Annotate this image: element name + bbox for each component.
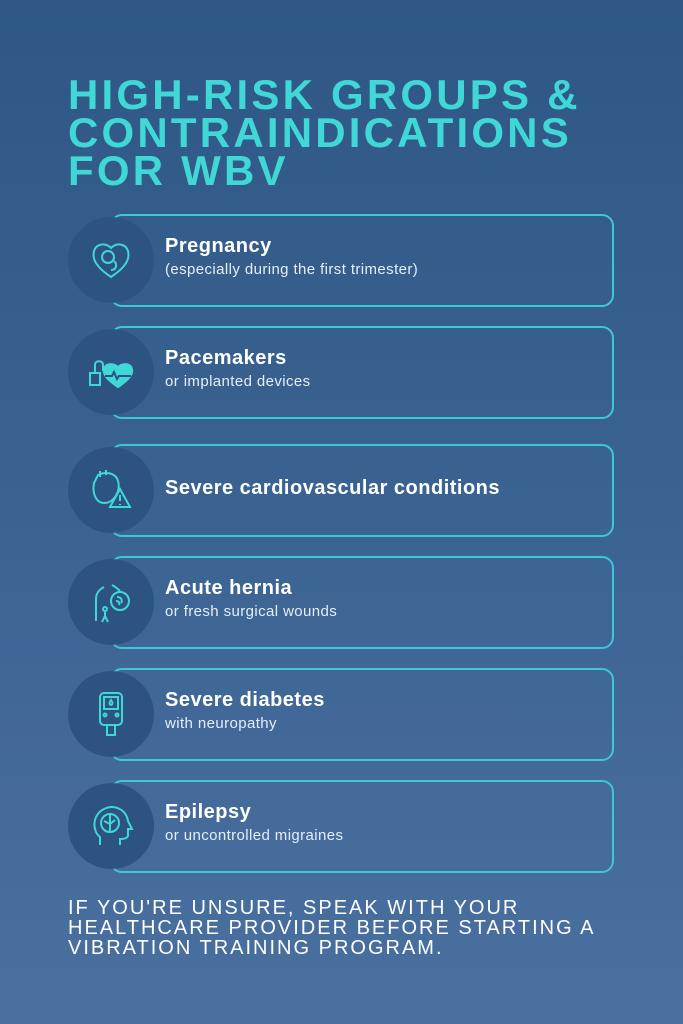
title [68, 71, 581, 194]
card: diabetes [110, 668, 614, 761]
footer note: HEALTHCARE PROVIDER BEFORE STARTING A [68, 917, 595, 939]
text: pacemakers [165, 347, 311, 390]
title: FOR WBV [68, 147, 289, 194]
text: epilepsy: or uncontrolled migraines [165, 827, 343, 844]
text: hernia: Acute hernia [165, 577, 292, 599]
text: epilepsy [165, 801, 343, 844]
footer note [68, 897, 595, 959]
icon: pregnancy [68, 217, 154, 303]
icon: glucose meter [68, 671, 154, 757]
icon: heart warning [68, 447, 154, 533]
icon: head brain [68, 783, 154, 869]
card: pacemakers [110, 326, 614, 419]
text: diabetes [165, 689, 325, 732]
text: pregnancy: (especially during the first trimester) [165, 261, 418, 278]
text: diabetes: with neuropathy [165, 715, 277, 732]
text: hernia [165, 577, 337, 620]
text: pacemakers: Pacemakers [165, 347, 287, 369]
title: HIGH-RISK GROUPS & [68, 71, 581, 118]
text: diabetes: Severe diabetes [165, 689, 325, 711]
footer note: VIBRATION TRAINING PROGRAM. [68, 937, 444, 959]
card: hernia [110, 556, 614, 649]
icon: hernia [68, 559, 154, 645]
text: pregnancy [165, 235, 418, 278]
text: cardiovascular: Severe cardiovascular conditions [165, 477, 500, 499]
text: pregnancy: Pregnancy [165, 235, 272, 257]
text: pacemakers: or implanted devices [165, 373, 311, 390]
card: epilepsy [110, 780, 614, 873]
text: hernia: or fresh surgical wounds [165, 603, 337, 620]
footer note: IF YOU'RE UNSURE, SPEAK WITH YOUR [68, 897, 519, 919]
text: epilepsy: Epilepsy [165, 801, 251, 823]
icon: pacemaker [68, 329, 154, 415]
card: cardiovascular [110, 444, 614, 537]
title: CONTRAINDICATIONS [68, 109, 572, 156]
card: pregnancy [110, 214, 614, 307]
